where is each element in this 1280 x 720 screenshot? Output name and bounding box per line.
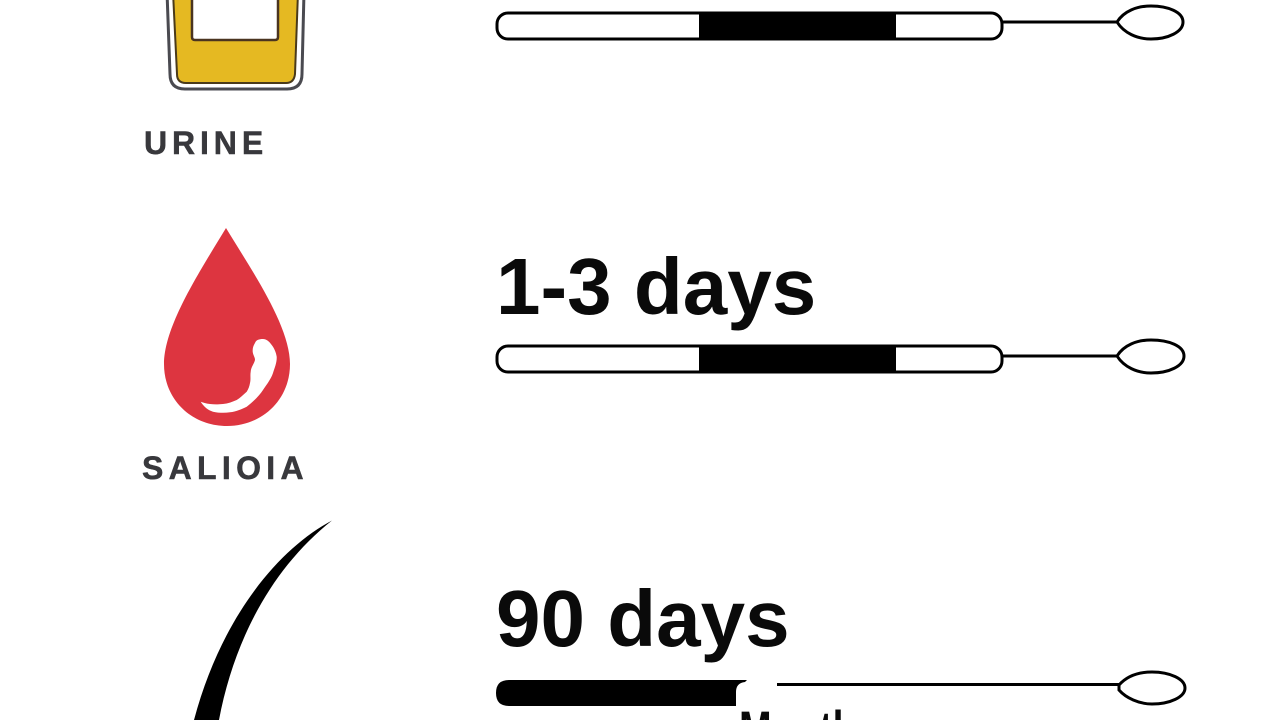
icon: urine cup — [167, 0, 304, 89]
test strip: hair — [496, 672, 1185, 706]
heading: 90 days: 90 days — [496, 574, 790, 663]
test strip: urine — [497, 6, 1183, 40]
label: saliva: SALIOIA — [142, 450, 309, 486]
row: hair — [194, 520, 1185, 720]
row: urine — [144, 0, 1183, 161]
test strip: saliva — [497, 340, 1184, 373]
row: saliva — [142, 228, 1184, 486]
label: urine: URINE — [144, 125, 268, 161]
heading: 1-3 days: 1-3 days — [496, 242, 816, 331]
icon: blood drop — [164, 228, 290, 426]
icon: hair strand — [194, 520, 332, 720]
